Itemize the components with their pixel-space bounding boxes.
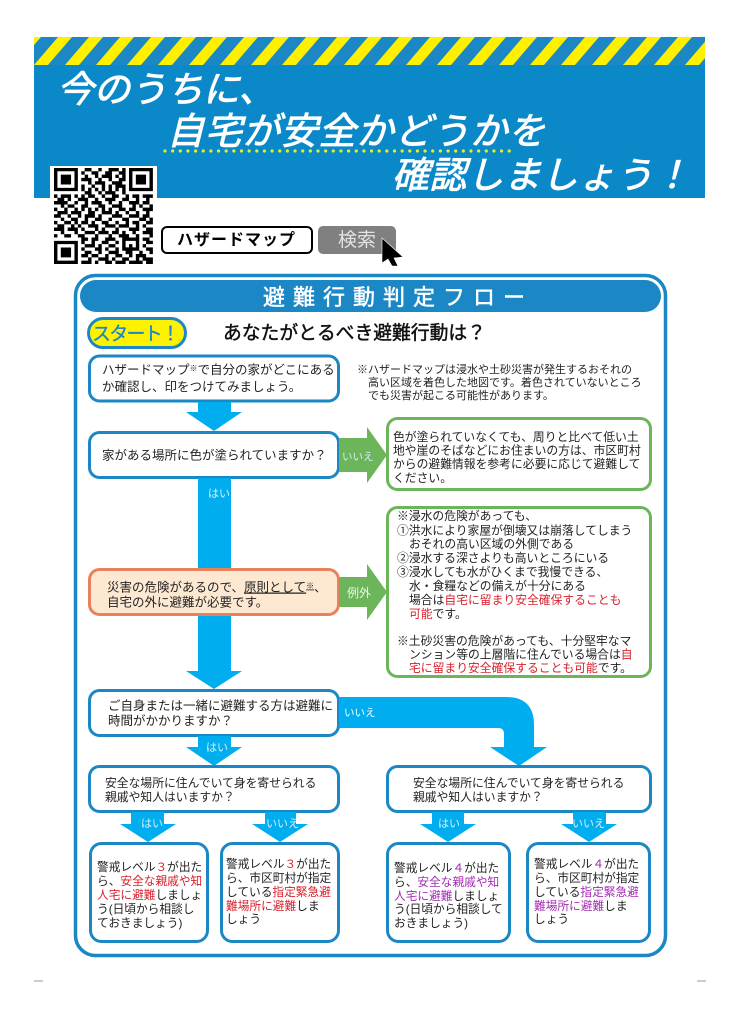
result: level 3 relatives: う(日頃から相談し [97, 903, 194, 916]
arrow: yes main down: はい [208, 487, 230, 500]
exception conditions: 場合は自宅に留まり安全確保することも [409, 593, 621, 607]
step: evacuation required: ※ [306, 582, 314, 590]
step: evacuation required: 、 [314, 580, 327, 594]
hazard map footnote: 高い区域を着色した地図です。着色されていないところ [368, 375, 642, 389]
result: level 3 relatives: ら、安全な親戚や知 [97, 874, 202, 888]
arrow: no to right branch: いいえ [344, 707, 376, 719]
exception conditions: おそれの高い区域の外側である [409, 537, 574, 551]
result: level 4 relatives [388, 844, 510, 942]
result: level 3 relatives: ておきましょう) [97, 917, 182, 930]
result: level 3 relatives [90, 844, 208, 942]
result: level 4 shelter: 警戒レベル４が出た [534, 857, 639, 871]
exception conditions: 水・食糧などの備えが十分にある [409, 579, 586, 593]
arrow: right yes [420, 812, 476, 842]
search box [162, 227, 312, 253]
arrow: no to advice [339, 427, 387, 483]
headline: 確認しましょう！ [392, 155, 690, 196]
step: takes time to evacuate: ご自身または一緒に避難する方は避難に [108, 698, 333, 713]
question: relatives right: 安全な場所に住んでいて身を寄せられる [413, 776, 624, 790]
advice: not coloured: 色が塗られていなくても、周りと比べて低い土 [393, 430, 639, 444]
step: takes time to evacuate [90, 690, 338, 736]
step: evacuation required: 災害の危険があるので、原則として [107, 580, 306, 594]
arrow: yes to left branch: はい [206, 741, 228, 754]
arrow: right yes: はい [438, 817, 460, 830]
advice: not coloured [388, 418, 650, 490]
hazard map footnote: ※ハザードマップは浸水や土砂災害が発生するおそれの [357, 362, 632, 376]
step: is home coloured [90, 432, 338, 478]
exception conditions: ①洪水により家屋が倒壊又は崩落してしまう [397, 524, 632, 538]
arrow: right no [561, 812, 617, 842]
advice: not coloured: からの避難情報を参考に必要に応じて避難して [393, 457, 640, 471]
arrow: no to right branch [339, 697, 547, 766]
step: check hazard map: ハザードマップ [102, 363, 190, 377]
advice: not coloured: 地や崖のそばなどにお住まいの方は、市区町村 [393, 444, 641, 458]
header banner [34, 37, 705, 198]
result: level 3 shelter: 難場所に避難しま [226, 899, 320, 913]
arrow: exception [339, 564, 387, 620]
arrow: right no: いいえ [572, 817, 605, 830]
question: relatives left: 親戚や知人はいますか？ [105, 790, 235, 804]
search box: ハザードマップ [177, 231, 296, 249]
arrow: yes to left branch [186, 736, 242, 766]
result: level 3 shelter [222, 844, 338, 942]
exception conditions: ※浸水の危険があっても、 [397, 509, 537, 523]
search button [318, 226, 396, 254]
hazard map footnote [357, 362, 642, 402]
result: level 4 shelter [528, 844, 650, 942]
exception conditions: 可能です。 [409, 607, 467, 621]
result: level 4 shelter: しょう [534, 913, 569, 926]
arrow: no to advice: いいえ [342, 451, 374, 463]
question: relatives right [388, 766, 650, 812]
start badge: スタート！ [92, 323, 180, 345]
panel title bar: 避難行動判定フロー [263, 285, 533, 310]
exception conditions [388, 508, 650, 676]
result: level 3 shelter: 警戒レベル３が出た [226, 857, 331, 871]
step: evacuation required: 自宅の外に避難が必要です。 [107, 594, 268, 610]
result: level 4 relatives: 警戒レベル４が出た [394, 861, 499, 875]
hazard stripes [34, 37, 705, 65]
step: takes time to evacuate: 時間がかかりますか？ [108, 713, 233, 728]
result: level 4 relatives: 人宅に避難しましょ [394, 889, 499, 903]
question heading: あなたがとるべき避難行動は？ [223, 322, 486, 343]
step: evacuation required [90, 570, 338, 614]
result: level 3 shelter: ら、市区町村が指定 [226, 871, 332, 885]
panel: evacuation flow [76, 276, 666, 956]
search button: 検索 [338, 229, 376, 251]
result: level 3 shelter: している指定緊急避 [226, 885, 331, 899]
arrow: left yes [120, 812, 176, 842]
headline: 自宅が安全かどうかを [167, 111, 545, 152]
headline: 今のうちに、 [57, 69, 275, 110]
arrow: yes main down [186, 478, 242, 689]
result: level 4 shelter: ら、市区町村が指定 [534, 871, 640, 885]
step: check hazard map: か確認し、印をつけてみましょう。 [102, 379, 301, 394]
arrow: left yes: はい [141, 817, 163, 830]
QR code [50, 166, 157, 268]
result: level 4 relatives: おきましょう) [394, 917, 468, 930]
step: check hazard map: で自分の家がどこにある [198, 362, 335, 377]
result: level 4 relatives: う(日頃から相談して [394, 903, 503, 916]
icon: mouse cursor [382, 238, 403, 266]
exception conditions: ンション等の上層階に住んでいる場合は自 [409, 648, 633, 662]
question: relatives left: 安全な場所に住んでいて身を寄せられる [105, 776, 316, 790]
arrow: left no: いいえ [266, 817, 299, 830]
exception conditions: 宅に留まり安全確保することも可能です。 [409, 661, 632, 675]
step: check hazard map: ※ [190, 364, 198, 373]
exception conditions: ※土砂災害の危険があっても、十分堅牢なマ [397, 634, 631, 648]
question: relatives right: 親戚や知人はいますか？ [413, 790, 543, 804]
arrow: down 1 [186, 402, 242, 431]
result: level 4 shelter: 難場所に避難しま [534, 899, 628, 913]
advice: not coloured: ください。 [393, 471, 452, 485]
step: is home coloured: 家がある場所に色が塗られていますか？ [102, 448, 327, 462]
exception conditions: ③浸水しても水がひくまで我慢できる、 [397, 565, 608, 579]
arrow: exception: 例外 [347, 586, 371, 600]
result: level 4 shelter: している指定緊急避 [534, 885, 639, 899]
step: check hazard map [90, 356, 338, 401]
result: level 3 relatives: 人宅に避難しましょ [97, 888, 202, 902]
panel title bar [80, 280, 661, 312]
result: level 3 shelter: しょう [226, 913, 261, 926]
result: level 3 relatives: 警戒レベル３が出た [97, 860, 202, 874]
result: level 4 relatives: ら、安全な親戚や知 [394, 875, 499, 889]
question: relatives left [90, 766, 338, 812]
start badge [88, 318, 186, 348]
hazard map footnote: でも災害が起こる可能性があります。 [368, 388, 554, 402]
exception conditions: ②浸水する深さよりも高いところにいる [397, 551, 609, 565]
arrow: left no [252, 812, 308, 842]
headline [57, 69, 690, 196]
